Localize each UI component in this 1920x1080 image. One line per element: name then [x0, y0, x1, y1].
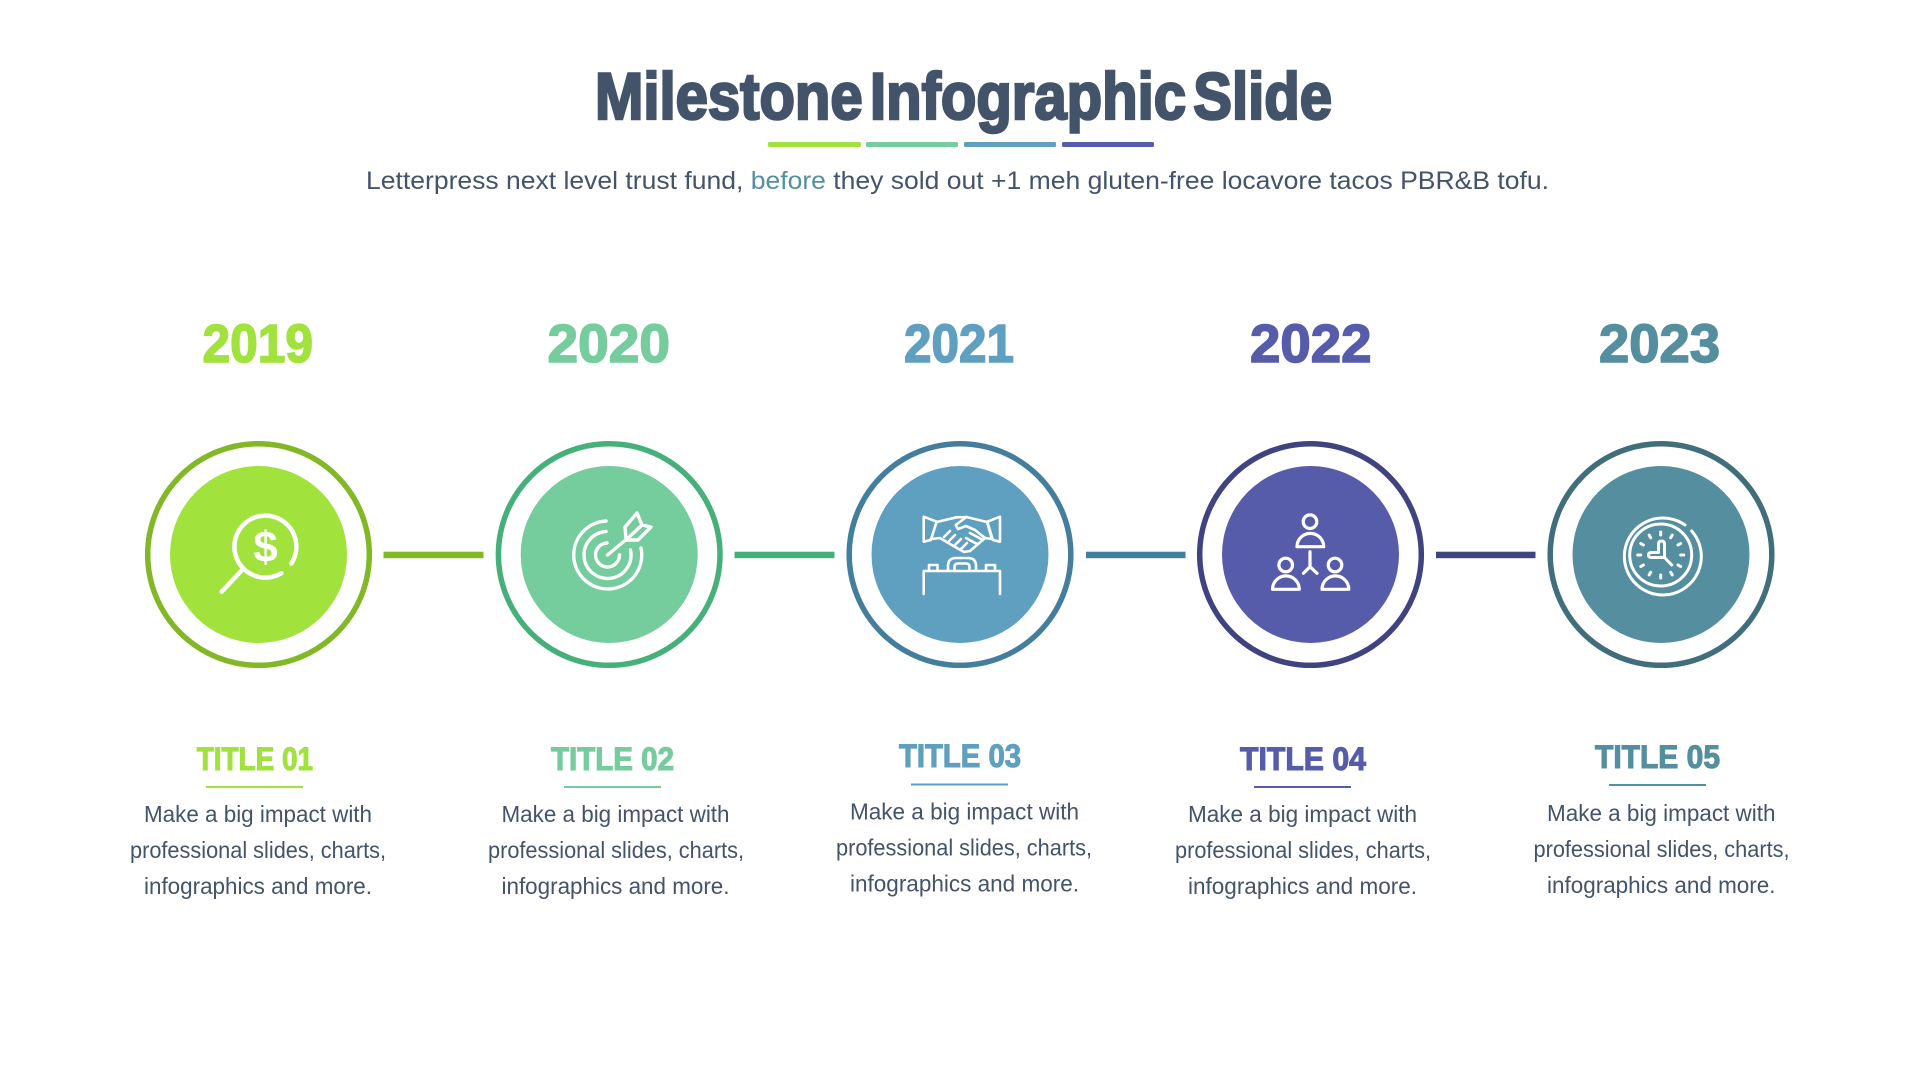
year 2019: 2019 [202, 314, 313, 374]
description 01: Make a big impact with [144, 801, 372, 827]
description 05: infographics and more. [1547, 872, 1776, 898]
description 02 [488, 801, 744, 899]
description 02: professional slides, charts, [488, 837, 744, 863]
underline 03 [911, 784, 1008, 786]
description 01: professional slides, charts, [130, 837, 386, 863]
title 01: TITLE 01 [197, 741, 313, 777]
milestone 2021 [836, 314, 1092, 896]
ring 2021 [849, 444, 1071, 665]
milestone 2022 [1175, 314, 1431, 899]
description 03 [836, 798, 1092, 896]
description 03: professional slides, charts, [836, 834, 1092, 860]
description 04 [1175, 801, 1431, 899]
description 04: professional slides, charts, [1175, 837, 1431, 863]
year 2022: 2022 [1250, 314, 1372, 374]
subtitle: Letterpress next level trust fund, before they sold out +1 meh gluten-free locavore tacos PBR&B tofu. [366, 167, 1549, 195]
connector 2 [734, 552, 834, 558]
ring 2023 [1550, 444, 1772, 665]
title 04: TITLE 04 [1240, 741, 1366, 777]
description 03: Make a big impact with [850, 798, 1079, 824]
ring 2022 [1200, 444, 1421, 665]
connector 3 [1086, 552, 1186, 558]
ring 2019 [148, 444, 369, 665]
disc 2019 [170, 466, 347, 643]
title 03: TITLE 03 [899, 738, 1021, 774]
underline 05 [1609, 784, 1706, 786]
disc 2023 [1572, 466, 1750, 643]
year 2021: 2021 [904, 314, 1014, 374]
description 02: Make a big impact with [502, 801, 730, 827]
icon: handshake over briefcase [924, 517, 1000, 594]
description 01: infographics and more. [144, 873, 372, 899]
icon: magnifier with dollar: $ [253, 523, 278, 572]
disc 2021 [872, 466, 1048, 643]
disc 2020 [521, 466, 698, 643]
ring 2020 [498, 444, 720, 665]
description 05: Make a big impact with [1547, 800, 1776, 826]
description 05: professional slides, charts, [1534, 836, 1790, 862]
connector 4 [1436, 552, 1536, 558]
icon: target with arrow [574, 513, 651, 589]
year 2020: 2020 [548, 314, 670, 374]
description 04: Make a big impact with [1188, 801, 1417, 827]
disc 2022 [1222, 466, 1399, 643]
description 01 [130, 801, 386, 899]
underline 04 [1254, 786, 1351, 788]
header [366, 59, 1549, 195]
title 05: TITLE 05 [1595, 739, 1720, 775]
description 03: infographics and more. [850, 870, 1079, 896]
underline 01 [206, 786, 303, 788]
title 02: TITLE 02 [551, 741, 674, 777]
title: Milestone Infographic Slide [595, 59, 1332, 133]
connector 1 [384, 552, 484, 558]
milestone 2020 [488, 314, 744, 899]
year 2023: 2023 [1599, 314, 1720, 374]
milestone 2019 [130, 314, 386, 899]
description 02: infographics and more. [502, 873, 730, 899]
underline 02 [564, 786, 661, 788]
title accent bars [768, 142, 1154, 147]
icon: three people network [1272, 515, 1349, 589]
icon: magnifier with dollar [222, 516, 296, 592]
milestone 2023 [1534, 314, 1790, 898]
description 04: infographics and more. [1188, 873, 1417, 899]
description 05 [1534, 800, 1790, 898]
icon: clock [1624, 518, 1701, 595]
